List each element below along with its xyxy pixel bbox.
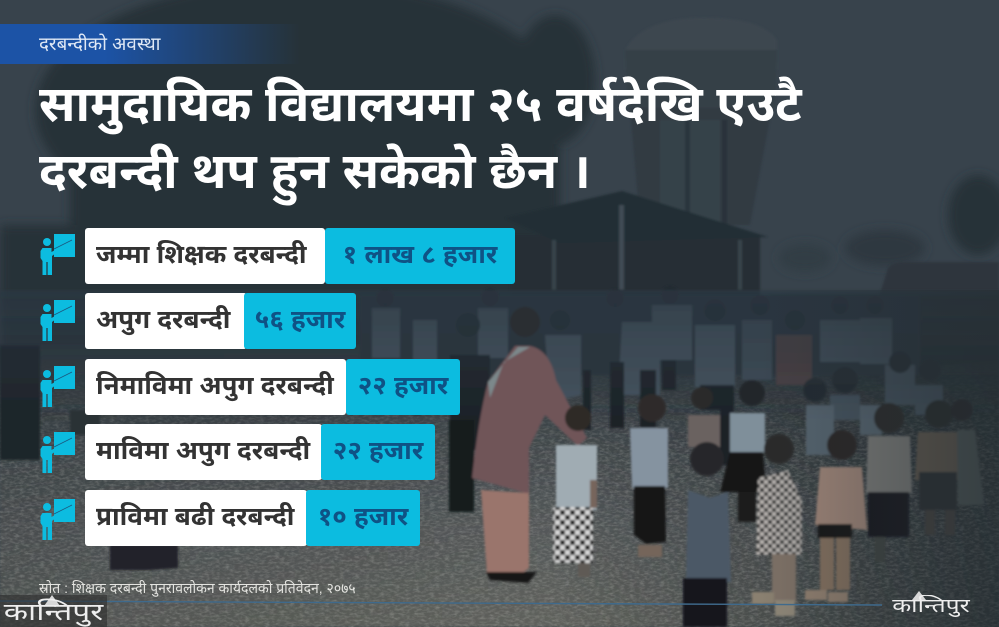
row 1 label: जम्मा शिक्षक दरबन्दी xyxy=(96,239,306,269)
ground xyxy=(0,345,999,627)
logo right peak xyxy=(912,591,926,600)
trees xyxy=(0,0,999,365)
teacher xyxy=(510,307,540,337)
row 1 label xyxy=(85,228,325,284)
row 1 value: १ लाख ८ हजार xyxy=(343,239,497,269)
row 2 value xyxy=(244,293,356,348)
row 1 icon xyxy=(40,234,75,275)
row 4 icon xyxy=(40,432,75,473)
logo left wordmark: कान्तिपुर xyxy=(4,599,103,626)
water tower xyxy=(625,18,777,70)
row 4 value xyxy=(321,424,435,480)
source note: स्रोत : शिक्षक दरबन्दी पुनरावलोकन कार्यदलको प्रतिवेदन, २०७५ xyxy=(39,580,356,596)
title: दरबन्दी थप हुन सकेको छैन । xyxy=(39,144,591,199)
footer line xyxy=(0,600,882,606)
row 3 value: २२ हजार xyxy=(358,370,448,400)
row 5 label: प्राविमा बढी दरबन्दी xyxy=(96,501,294,531)
category tag xyxy=(0,24,300,64)
bus xyxy=(878,262,999,305)
row 3 icon xyxy=(40,366,75,407)
logo left peak xyxy=(44,595,60,605)
row 3 label: निमाविमा अपुग दरबन्दी xyxy=(96,370,334,400)
row 2 label xyxy=(85,293,247,348)
children xyxy=(565,405,591,431)
row 2 icon xyxy=(40,300,75,341)
title: सामुदायिक विद्यालयमा २५ वर्षदेखि एउटै xyxy=(39,77,802,132)
row 4 label xyxy=(85,424,322,480)
logo right xyxy=(892,591,970,617)
row 5 value: १० हजार xyxy=(318,501,408,531)
shelter xyxy=(510,235,760,300)
grass texture xyxy=(0,360,999,627)
row 3 value xyxy=(346,359,460,414)
row 5 label xyxy=(85,490,307,546)
title xyxy=(39,76,802,206)
row 2 label: अपुग दरबन्दी xyxy=(96,304,230,334)
category tag: दरबन्दीको अवस्था xyxy=(39,33,161,54)
row 1 value xyxy=(325,228,515,284)
row 4 value: २२ हजार xyxy=(333,435,423,465)
row 2 value: ५६ हजार xyxy=(255,304,345,334)
row 3 label xyxy=(85,359,346,414)
logo right wordmark: कान्तिपुर xyxy=(892,596,970,617)
row 5 icon xyxy=(40,499,75,540)
logo left xyxy=(0,595,107,627)
row 4 label: माविमा अपुग दरबन्दी xyxy=(96,435,310,465)
row 5 value xyxy=(306,490,420,546)
crowd back row xyxy=(360,295,920,375)
student with stripes xyxy=(450,355,490,450)
